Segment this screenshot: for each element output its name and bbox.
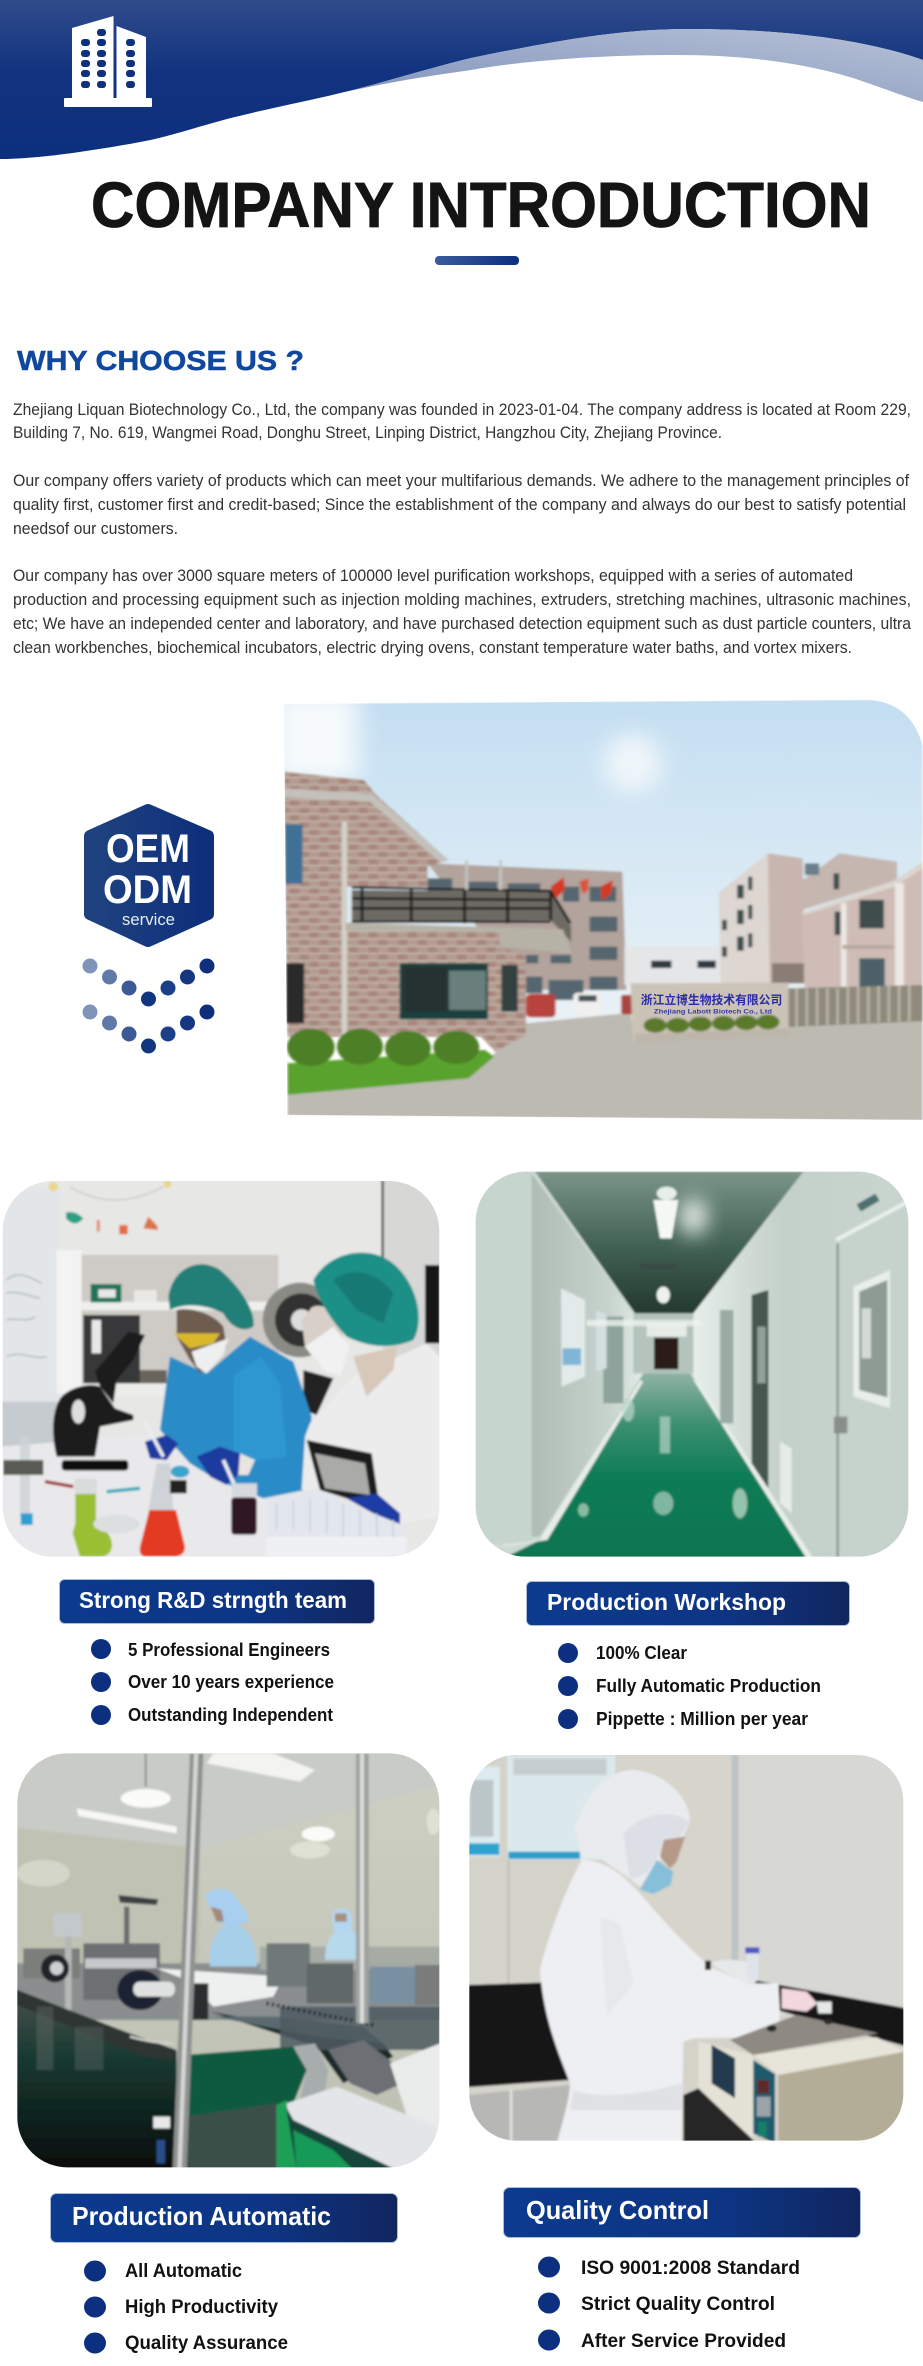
text block: company address: Building 7, No. 619, Wangmei Road, Donghu Street, Linping District, Hangzhou City, Zhejiang Province. [13, 424, 722, 442]
list: quality points: ISO 9001:2008 Standard [581, 2257, 800, 2279]
label: production workshop: Production Workshop [547, 1589, 786, 1615]
list: automatic points [84, 2260, 288, 2354]
text block: workshops and equipment: Our company has over 3000 square meters of 100000 level purification workshops, equipped with a series of automated [13, 567, 853, 585]
list: R&D team points [91, 1639, 334, 1725]
photo: quality control cleanroom [467, 1750, 907, 2143]
list: automatic points: All Automatic [125, 2260, 242, 2282]
list: R&D team points: Outstanding Independent [128, 1705, 333, 1725]
text block: products and principles [13, 472, 909, 538]
label: quality control [504, 2188, 860, 2238]
text block: company address [13, 401, 911, 442]
badge: OEM ODM service: OEM [106, 827, 190, 871]
list: workshop points: Pippette : Million per year [596, 1709, 808, 1729]
list: workshop points: 100% Clear [596, 1643, 687, 1663]
text block: workshops and equipment: production and processing equipment such as injection molding machines, extruders, stretching machines, ultrasonic machines, [13, 591, 911, 609]
photo: production line [13, 1750, 443, 2170]
label: R&D team [60, 1580, 374, 1624]
label: R&D team: Strong R&D strngth team [79, 1587, 347, 1613]
photo: factory exterior [272, 693, 923, 1122]
photo: R&D laboratory [0, 1177, 443, 1560]
list: R&D team points: 5 Professional Engineers [128, 1640, 330, 1660]
list: automatic points: High Productivity [125, 2296, 278, 2318]
sign text on factory gate: Zhejiang Labott Biotech Co., Ltd [654, 1007, 772, 1015]
list: quality points: Strict Quality Control [581, 2293, 775, 2315]
title: COMPANY INTRODUCTION [91, 169, 871, 241]
label: production automatic [50, 2194, 398, 2242]
text block: workshops and equipment: clean workbenches, biochemical incubators, electric drying ovens, constant temperature water baths, and vortex mixers. [13, 639, 852, 657]
icon: building [64, 16, 152, 107]
list: workshop points [558, 1643, 821, 1729]
text block: products and principles: Our company offers variety of products which can meet your multifarious demands. We adhere to the management principles of [13, 472, 909, 490]
list: workshop points: Fully Automatic Production [596, 1676, 821, 1696]
heading: why choose us: WHY CHOOSE US ? [17, 345, 304, 376]
list: automatic points: Quality Assurance [125, 2332, 288, 2354]
label: production automatic: Production Automatic [72, 2201, 331, 2231]
text block: workshops and equipment [13, 567, 912, 657]
list: R&D team points: Over 10 years experience [128, 1672, 334, 1692]
badge: OEM ODM service [90, 810, 208, 941]
header wave banner [0, 0, 923, 159]
badge: OEM ODM service: ODM [103, 868, 192, 912]
label: production workshop [526, 1582, 850, 1626]
list: quality points [538, 2256, 800, 2352]
text block: products and principles: needsof our customers. [13, 520, 178, 538]
badge: OEM ODM service: service [122, 910, 175, 929]
text block: products and principles: quality first, customer first and credit-based; Since the establishment of the company and always do our best to satisfy potential [13, 496, 906, 514]
title underline accent [435, 256, 519, 265]
photo: clean corridor [460, 1167, 913, 1560]
label: quality control: Quality Control [526, 2195, 709, 2225]
sign text on factory gate [641, 993, 782, 1015]
icon: dotted chevrons [82, 958, 214, 1054]
list: quality points: After Service Provided [581, 2330, 786, 2352]
sign text on factory gate: 浙江立博生物技术有限公司 [641, 993, 782, 1007]
